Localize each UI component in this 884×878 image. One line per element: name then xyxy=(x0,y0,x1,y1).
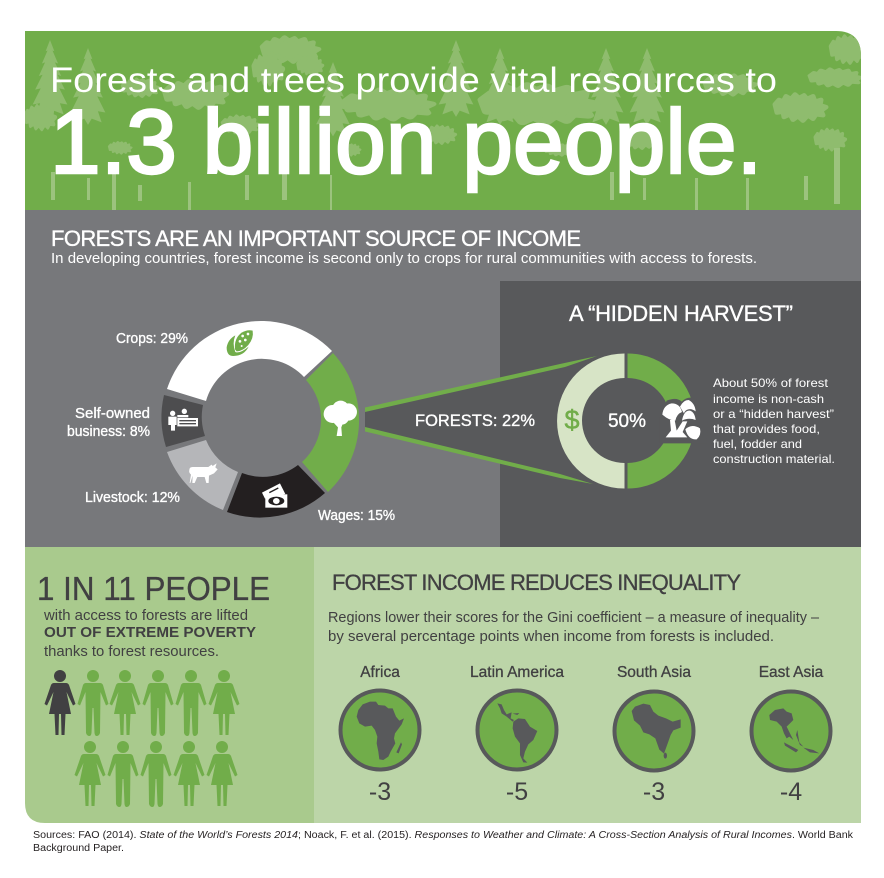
text block: hidden harvest description: fuel, fodder and xyxy=(713,437,802,451)
panel: forest income reduces inequality xyxy=(314,547,861,823)
heading: 1 in 11 people: 1 IN 11 PEOPLE xyxy=(37,570,270,607)
region: Africa: Africa xyxy=(360,664,400,681)
region: East Asia: -4 xyxy=(780,778,802,806)
subheading: income: In developing countries, forest income is second only to crops for rural communities with access to forests. xyxy=(51,251,757,267)
text block: sources: Background Paper. xyxy=(33,843,124,854)
text block: poverty xyxy=(43,608,256,660)
label: wages: Wages: 15% xyxy=(318,508,395,524)
icon: tree xyxy=(324,401,357,436)
text block: hidden harvest description xyxy=(713,376,835,466)
text block: poverty: with access to forests are lifted xyxy=(43,608,248,624)
panel: income section xyxy=(25,210,861,547)
person: highlighted xyxy=(44,670,76,735)
text block: hidden harvest description: or a “hidden harvest” xyxy=(713,407,834,421)
icon: business xyxy=(168,409,198,431)
panel: header banner xyxy=(25,31,866,210)
half: non-cash income xyxy=(628,354,695,488)
region: East Asia: East Asia xyxy=(759,664,824,681)
text block: hidden harvest description: construction material. xyxy=(713,452,835,466)
label: forests 22%: FORESTS: 22% xyxy=(415,411,535,430)
icon: corn xyxy=(227,330,253,356)
label: self-owned business: Self-owned xyxy=(75,406,150,422)
text block: hidden harvest description: About 50% of forest xyxy=(713,376,829,390)
text block: gini xyxy=(328,610,820,645)
text block: poverty: thanks to forest resources. xyxy=(44,644,219,660)
heading: income: FORESTS ARE AN IMPORTANT SOURCE OF INCOME xyxy=(51,226,581,251)
segment: livestock xyxy=(167,440,238,510)
icon: money xyxy=(262,483,287,508)
label: self-owned business xyxy=(67,406,150,440)
heading: inequality: FOREST INCOME REDUCES INEQUALITY xyxy=(332,570,741,595)
text block: gini: Regions lower their scores for the Gini coefficient – a measure of inequality – xyxy=(328,610,820,626)
icon: cow xyxy=(189,463,218,483)
region: Latin America: -5 xyxy=(506,778,528,806)
region: Africa xyxy=(340,664,420,806)
text block: sources xyxy=(33,830,854,854)
segment: forests xyxy=(302,353,359,492)
value: 50%: 50% xyxy=(608,411,646,432)
donut chart: hidden harvest xyxy=(557,354,708,488)
heading line: Forests and trees provide vital resources to xyxy=(50,61,777,100)
region: East Asia xyxy=(752,664,830,806)
label: crops: Crops: 29% xyxy=(116,331,188,347)
icon: dollar sign: $ xyxy=(564,405,580,435)
text block: hidden harvest description: income is non-cash xyxy=(713,392,824,406)
segment: wages xyxy=(227,465,325,518)
panel: hidden harvest background xyxy=(500,281,861,547)
region: South Asia: South Asia xyxy=(617,664,691,681)
segment: crops xyxy=(167,321,332,401)
trunks xyxy=(51,148,840,210)
callout: funnel to hidden harvest xyxy=(365,356,597,484)
region: Africa: -3 xyxy=(369,778,391,806)
text block: poverty: OUT OF EXTREME POVERTY xyxy=(44,625,256,641)
pictogram: 1 in 11 people xyxy=(44,670,240,807)
region: South Asia xyxy=(614,664,694,806)
icon: mushrooms xyxy=(660,398,708,443)
half: cash income xyxy=(557,354,624,488)
text block: hidden harvest description: that provides food, xyxy=(713,422,820,436)
big headline: 1.3 billion people. xyxy=(50,92,762,193)
region: Latin America xyxy=(470,664,564,806)
heading: hidden harvest: A “HIDDEN HARVEST” xyxy=(569,301,793,326)
panel: 1 in 11 people xyxy=(25,547,314,823)
region: Latin America: Latin America xyxy=(470,664,564,681)
donut chart: income sources xyxy=(161,321,359,518)
region: South Asia: -3 xyxy=(643,778,665,806)
label: livestock: Livestock: 12% xyxy=(85,490,180,506)
forest silhouette background xyxy=(25,36,866,210)
text block: gini: by several percentage points when income from forests is included. xyxy=(328,629,774,645)
text block: sources: Sources: FAO (2014). State of the World’s Forests 2014 ; Noack, F. et al. (2015). Responses to Weather and Climate: A Cross-Section Analysis of Rural Incomes . World Bank xyxy=(33,830,854,841)
label: self-owned business: business: 8% xyxy=(67,424,150,440)
segment: self-owned business xyxy=(161,395,205,447)
